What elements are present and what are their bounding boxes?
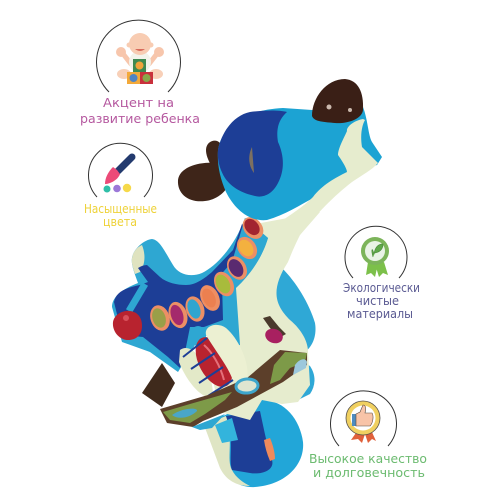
drum disc bbox=[206, 325, 248, 382]
panel outer bbox=[112, 218, 268, 372]
icon: eco badge bbox=[361, 237, 389, 277]
tail cream tip bbox=[132, 245, 144, 274]
thigh rim blue bbox=[298, 362, 314, 400]
panel light stripe bbox=[129, 284, 145, 311]
nose bbox=[312, 79, 363, 123]
strap lower blue bbox=[192, 414, 225, 430]
toy: dog with instrument panel bbox=[112, 79, 382, 487]
label: Насыщенные bbox=[84, 201, 157, 216]
foot bbox=[204, 400, 303, 487]
icon: baby with blocks bbox=[116, 33, 164, 84]
ear: large bbox=[178, 163, 228, 201]
label: Высокое качество bbox=[309, 451, 427, 466]
callout: vivid colours bbox=[84, 143, 157, 229]
circle arc bbox=[330, 391, 397, 446]
head dark blue bbox=[218, 110, 287, 197]
panel dark blue bbox=[114, 224, 248, 368]
drum red bbox=[188, 331, 240, 393]
eye bbox=[249, 147, 254, 173]
strap clip bbox=[215, 418, 238, 443]
head light blue bbox=[218, 107, 382, 220]
head bbox=[218, 79, 382, 235]
callout: child development bbox=[80, 20, 200, 126]
callout: quality bbox=[309, 391, 427, 480]
callout: eco materials bbox=[343, 226, 420, 321]
label line 3: материалы bbox=[347, 306, 413, 321]
icon: paint brush bbox=[104, 157, 132, 192]
red knob bbox=[113, 311, 142, 340]
keys bbox=[147, 213, 268, 333]
label line 2: развитие ребенка bbox=[80, 111, 200, 126]
key strip bbox=[216, 218, 268, 302]
head cream bbox=[280, 119, 378, 235]
circle arc bbox=[88, 143, 152, 197]
circle arc bbox=[345, 226, 407, 278]
drum collar bbox=[179, 348, 213, 398]
drum bbox=[179, 325, 248, 398]
flower on thigh bbox=[263, 316, 286, 346]
label: Акцент на bbox=[103, 95, 174, 110]
label line 2: и долговечность bbox=[313, 465, 425, 480]
label: Экологически bbox=[343, 280, 420, 295]
ear: back bbox=[206, 141, 220, 167]
circle arc bbox=[96, 20, 181, 92]
drum blue patch bbox=[190, 326, 206, 346]
label line 2: цвета bbox=[103, 214, 137, 229]
label line 2: чистые bbox=[356, 293, 399, 308]
rear leg blue bbox=[268, 268, 316, 352]
body cream bbox=[205, 212, 320, 420]
icon: quality badge thumb up bbox=[346, 401, 380, 443]
strap bbox=[142, 350, 307, 430]
